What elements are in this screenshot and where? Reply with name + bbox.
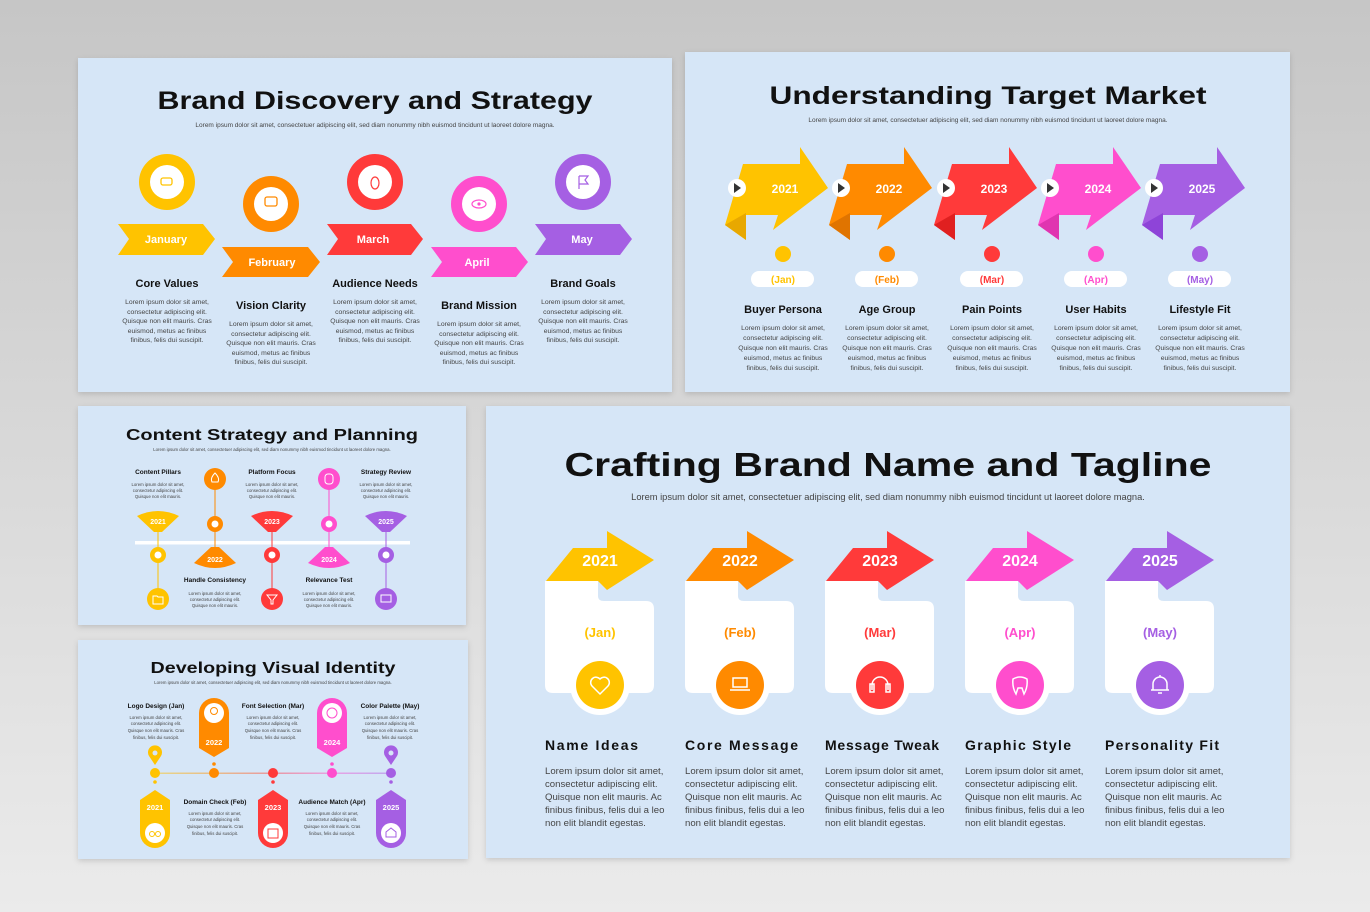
- text: logo design: [128, 703, 184, 740]
- card: 2022 core message: non elit blandit egestas.: [685, 818, 786, 829]
- step: january: consectetur adipiscing elit.: [127, 309, 207, 316]
- text: logo design: Lorem ipsum dolor sit amet,: [129, 715, 183, 720]
- card: 2024 graphic style: 2024: [1002, 553, 1038, 570]
- card: 2025 personality fit: non elit blandit egestas.: [1105, 818, 1206, 829]
- step: 2021 buyer persona: consectetur adipiscing elit.: [743, 335, 823, 342]
- text: content pillars: Quisque non elit mauris.: [135, 494, 181, 499]
- card: 2024 graphic style: consectetur adipiscing elit.: [965, 779, 1078, 790]
- subtitle: Lorem ipsum dolor sit amet, consectetuer adipiscing elit, sed diam nonummy nibh euismod tincidunt ut laoreet dolore magna.: [154, 680, 392, 685]
- step: march: consectetur adipiscing elit.: [335, 309, 415, 316]
- text: domain check: Domain Check (Feb): [184, 799, 246, 806]
- step: march: Quisque non elit mauris. Cras: [330, 318, 420, 325]
- node: 2025: 2025: [378, 519, 394, 526]
- step: 2024 user habits: [1038, 147, 1141, 372]
- step: 2021 buyer persona: finibus, felis dui suscipit.: [747, 365, 820, 372]
- card: 2025 personality fit: [1105, 531, 1224, 829]
- card: 2021 name ideas: 2021: [582, 553, 618, 570]
- node: 2023: [251, 511, 293, 610]
- text: font selection: consectetur adipiscing elit.: [248, 721, 298, 726]
- node: 2022: 2022: [206, 738, 222, 747]
- step: january: Lorem ipsum dolor sit amet,: [125, 299, 209, 306]
- text: platform focus: Platform Focus: [248, 469, 296, 476]
- card: 2021 name ideas: non elit blandit egestas.: [545, 818, 646, 829]
- step: 2023 pain points: finibus, felis dui suscipit.: [956, 365, 1029, 372]
- text: relevance test: [302, 577, 356, 608]
- card: 2023 message tweak: non elit blandit egestas.: [825, 818, 926, 829]
- card: 2022 core message: finibus finibus, felis dui a leo: [685, 805, 804, 816]
- step: 2024 user habits: consectetur adipiscing elit.: [1056, 335, 1136, 342]
- step: 2021 buyer persona: 2021: [772, 182, 799, 196]
- text: logo design: consectetur adipiscing elit.: [131, 721, 181, 726]
- step: 2023 pain points: Pain Points: [962, 304, 1022, 316]
- step: march: Audience Needs: [332, 278, 418, 290]
- step: march: Lorem ipsum dolor sit amet,: [333, 299, 417, 306]
- step: 2025 lifestyle fit: [1142, 147, 1245, 372]
- title: crafting brand name: Crafting Brand Name and Tagline: [564, 446, 1212, 483]
- node: 2024: [317, 698, 347, 778]
- card: 2024 graphic style: non elit blandit egestas.: [965, 818, 1066, 829]
- title: visual identity: Developing Visual Identity: [150, 660, 396, 677]
- card: 2022 core message: [685, 531, 804, 829]
- timeline line: [155, 772, 391, 774]
- title: content strategy: Content Strategy and Planning: [126, 427, 418, 444]
- card: 2023 message tweak: [825, 531, 944, 829]
- step: 2021 buyer persona: [725, 147, 828, 372]
- step: 2025 lifestyle fit: Lorem ipsum dolor sit amet,: [1158, 325, 1242, 332]
- step: 2022 age group: euismod, metus ac finibus: [848, 355, 927, 362]
- text: strategy review: [359, 469, 413, 499]
- text: handle consistency: consectetur adipiscing elit.: [190, 597, 240, 602]
- card: 2021 name ideas: Quisque non elit mauris. Ac: [545, 792, 662, 803]
- node: 2025: [376, 745, 406, 848]
- node: 2023: 2023: [264, 519, 280, 526]
- card: 2024 graphic style: [965, 531, 1084, 829]
- step: may: finibus, felis dui suscipit.: [547, 337, 620, 344]
- card: 2025 personality fit: (May): [1143, 625, 1177, 640]
- text: handle consistency: [184, 577, 246, 608]
- text: logo design: Logo Design (Jan): [128, 703, 184, 710]
- step: 2021 buyer persona: euismod, metus ac finibus: [744, 355, 823, 362]
- step: may: euismod, metus ac finibus: [544, 328, 623, 335]
- text: domain check: consectetur adipiscing elit.: [190, 817, 240, 822]
- text: font selection: [242, 703, 304, 740]
- text: relevance test: consectetur adipiscing elit.: [304, 597, 354, 602]
- text: platform focus: [245, 469, 299, 499]
- step: april: Quisque non elit mauris. Cras: [434, 340, 524, 347]
- card: 2024 graphic style: Lorem ipsum dolor sit amet,: [965, 766, 1083, 777]
- panel: brand discovery: [78, 58, 672, 392]
- text: color palette: finibus, felis dui suscipit.: [367, 735, 413, 740]
- step: may: [535, 154, 632, 344]
- step: february: consectetur adipiscing elit.: [231, 331, 311, 338]
- text: audience match: [298, 799, 366, 836]
- panel: content strategy: [78, 406, 466, 625]
- text: logo design: finibus, felis dui suscipit.: [133, 735, 179, 740]
- text: strategy review: Strategy Review: [361, 469, 412, 476]
- card: 2022 core message: (Feb): [724, 625, 756, 640]
- step: may: May: [571, 234, 594, 246]
- card: 2021 name ideas: [545, 531, 664, 829]
- step: may: consectetur adipiscing elit.: [543, 309, 623, 316]
- text: strategy review: Quisque non elit mauris.: [363, 494, 409, 499]
- subtitle: Lorem ipsum dolor sit amet, consectetuer adipiscing elit, sed diam nonummy nibh euismod tincidunt ut laoreet dolore magna.: [808, 117, 1168, 124]
- node: 2021: 2021: [147, 803, 163, 812]
- node: 2021: [137, 511, 179, 610]
- card: 2024 graphic style: (Apr): [1004, 625, 1036, 640]
- text: color palette: Lorem ipsum dolor sit amet,: [363, 715, 417, 720]
- step: february: euismod, metus ac finibus: [232, 350, 311, 357]
- step: 2025 lifestyle fit: 2025: [1189, 182, 1216, 196]
- text: content pillars: [131, 469, 185, 499]
- card: 2021 name ideas: (Jan): [584, 625, 616, 640]
- text: strategy review: Lorem ipsum dolor sit amet,: [359, 482, 413, 487]
- text: audience match: consectetur adipiscing elit.: [307, 817, 357, 822]
- step: 2022 age group: Age Group: [859, 304, 916, 316]
- text: content pillars: consectetur adipiscing elit.: [133, 488, 183, 493]
- step: april: Brand Mission: [441, 300, 517, 312]
- step: 2021 buyer persona: Buyer Persona: [744, 304, 823, 316]
- step: march: euismod, metus ac finibus: [336, 328, 415, 335]
- text: font selection: Quisque non elit mauris. Cras: [245, 728, 301, 733]
- step: 2023 pain points: Quisque non elit mauris. Cras: [947, 345, 1037, 352]
- card: 2024 graphic style: finibus finibus, felis dui a leo: [965, 805, 1084, 816]
- node: 2024: 2024: [324, 738, 341, 747]
- node: 2023: [258, 768, 288, 848]
- text: color palette: Quisque non elit mauris. Cras: [362, 728, 418, 733]
- text: color palette: [361, 703, 419, 740]
- card: 2025 personality fit: Personality Fit: [1105, 737, 1219, 753]
- step: april: April: [464, 257, 490, 269]
- step: march: March: [357, 234, 389, 246]
- card: 2025 personality fit: consectetur adipiscing elit.: [1105, 779, 1218, 790]
- step: 2025 lifestyle fit: (May): [1187, 275, 1213, 286]
- step: april: consectetur adipiscing elit.: [439, 331, 519, 338]
- subtitle: Lorem ipsum dolor sit amet, consectetuer adipiscing elit, sed diam nonummy nibh euismod tincidunt ut laoreet dolore magna.: [195, 122, 555, 129]
- card: 2023 message tweak: Quisque non elit mauris. Ac: [825, 792, 942, 803]
- text: handle consistency: Lorem ipsum dolor sit amet,: [188, 591, 242, 596]
- step: april: Lorem ipsum dolor sit amet,: [437, 321, 521, 328]
- card: 2022 core message: Core Message: [685, 737, 798, 753]
- step: april: finibus, felis dui suscipit.: [443, 359, 516, 366]
- step: 2024 user habits: Quisque non elit mauris. Cras: [1051, 345, 1141, 352]
- text: domain check: finibus, felis dui suscipit.: [192, 831, 238, 836]
- text: content pillars: Content Pillars: [135, 469, 181, 476]
- card: 2021 name ideas: finibus finibus, felis dui a leo: [545, 805, 664, 816]
- node: 2022: 2022: [207, 557, 223, 564]
- step: 2025 lifestyle fit: finibus, felis dui suscipit.: [1164, 365, 1237, 372]
- card: 2022 core message: consectetur adipiscing elit.: [685, 779, 798, 790]
- text: audience match: Audience Match (Apr): [298, 799, 366, 806]
- card: 2023 message tweak: (Mar): [864, 625, 896, 640]
- text: relevance test: Relevance Test: [306, 577, 353, 584]
- step: 2023 pain points: Lorem ipsum dolor sit amet,: [950, 325, 1034, 332]
- text: content pillars: Lorem ipsum dolor sit amet,: [131, 482, 185, 487]
- step: 2023 pain points: consectetur adipiscing elit.: [952, 335, 1032, 342]
- text: handle consistency: Handle Consistency: [184, 577, 246, 584]
- text: color palette: consectetur adipiscing elit.: [365, 721, 415, 726]
- step: january: Quisque non elit mauris. Cras: [122, 318, 212, 325]
- step: 2022 age group: [829, 147, 932, 372]
- step: march: [327, 154, 423, 344]
- timeline bar: [135, 541, 410, 544]
- card: 2023 message tweak: 2023: [862, 553, 898, 570]
- card: 2025 personality fit: finibus finibus, felis dui a leo: [1105, 805, 1224, 816]
- step: 2022 age group: Lorem ipsum dolor sit amet,: [845, 325, 929, 332]
- step: 2021 buyer persona: (Jan): [771, 275, 795, 286]
- node: 2025: 2025: [383, 803, 399, 812]
- text: color palette: Color Palette (May): [361, 703, 419, 710]
- card: 2024 graphic style: Graphic Style: [965, 737, 1071, 753]
- node: 2021: [140, 745, 170, 848]
- step: january: [118, 154, 215, 344]
- step: 2023 pain points: (Mar): [980, 275, 1004, 286]
- text: font selection: finibus, felis dui suscipit.: [250, 735, 296, 740]
- step: 2025 lifestyle fit: euismod, metus ac finibus: [1161, 355, 1240, 362]
- step: february: finibus, felis dui suscipit.: [235, 359, 308, 366]
- step: 2024 user habits: User Habits: [1065, 304, 1127, 316]
- node: 2022: [194, 468, 236, 568]
- step: 2025 lifestyle fit: Lifestyle Fit: [1169, 304, 1231, 316]
- card: 2023 message tweak: consectetur adipiscing elit.: [825, 779, 938, 790]
- step: 2022 age group: 2022: [876, 182, 903, 196]
- step: 2025 lifestyle fit: Quisque non elit mauris. Cras: [1155, 345, 1245, 352]
- step: 2021 buyer persona: Lorem ipsum dolor sit amet,: [741, 325, 825, 332]
- step: 2022 age group: Quisque non elit mauris. Cras: [842, 345, 932, 352]
- text: relevance test: Lorem ipsum dolor sit amet,: [302, 591, 356, 596]
- step: may: Lorem ipsum dolor sit amet,: [541, 299, 625, 306]
- step: 2022 age group: (Feb): [875, 275, 899, 286]
- text: audience match: Quisque non elit mauris. Cras: [304, 824, 360, 829]
- step: 2024 user habits: euismod, metus ac finibus: [1057, 355, 1136, 362]
- subtitle: Lorem ipsum dolor sit amet, consectetuer adipiscing elit, sed diam nonummy nibh euismod tincidunt ut laoreet dolore magna.: [153, 447, 391, 452]
- step: january: euismod, metus ac finibus: [128, 328, 207, 335]
- node: 2025: [365, 511, 407, 610]
- card: 2023 message tweak: Lorem ipsum dolor sit amet,: [825, 766, 943, 777]
- text: handle consistency: Quisque non elit mauris.: [192, 603, 238, 608]
- card: 2021 name ideas: consectetur adipiscing elit.: [545, 779, 658, 790]
- subtitle: Lorem ipsum dolor sit amet, consectetuer adipiscing elit, sed diam nonummy nibh euismod tincidunt ut laoreet dolore magna.: [631, 492, 1145, 502]
- step: 2022 age group: finibus, felis dui suscipit.: [851, 365, 924, 372]
- step: 2024 user habits: finibus, felis dui suscipit.: [1060, 365, 1133, 372]
- card: 2023 message tweak: Message Tweak: [825, 737, 939, 753]
- step: may: Brand Goals: [550, 278, 616, 290]
- step: april: [431, 176, 528, 366]
- step: february: Lorem ipsum dolor sit amet,: [229, 321, 313, 328]
- node: 2024: 2024: [321, 557, 337, 564]
- text: audience match: Lorem ipsum dolor sit amet,: [305, 811, 359, 816]
- text: platform focus: Lorem ipsum dolor sit amet,: [245, 482, 299, 487]
- node: 2023: 2023: [265, 803, 281, 812]
- text: strategy review: consectetur adipiscing elit.: [361, 488, 411, 493]
- step: february: February: [248, 257, 296, 269]
- text: domain check: [184, 799, 246, 836]
- step: 2024 user habits: 2024: [1085, 182, 1112, 196]
- text: platform focus: consectetur adipiscing elit.: [247, 488, 297, 493]
- step: february: [222, 176, 320, 366]
- title: target market: Understanding Target Market: [770, 82, 1207, 110]
- card: 2025 personality fit: Lorem ipsum dolor sit amet,: [1105, 766, 1223, 777]
- card: 2022 core message: Lorem ipsum dolor sit amet,: [685, 766, 803, 777]
- text: logo design: Quisque non elit mauris. Cras: [128, 728, 184, 733]
- text: font selection: Lorem ipsum dolor sit amet,: [246, 715, 300, 720]
- step: 2021 buyer persona: Quisque non elit mauris. Cras: [738, 345, 828, 352]
- text: domain check: Quisque non elit mauris. Cras: [187, 824, 243, 829]
- step: january: finibus, felis dui suscipit.: [131, 337, 204, 344]
- step: april: euismod, metus ac finibus: [440, 350, 519, 357]
- node: 2021: 2021: [150, 519, 166, 526]
- card: 2023 message tweak: finibus finibus, felis dui a leo: [825, 805, 944, 816]
- step: 2025 lifestyle fit: consectetur adipiscing elit.: [1160, 335, 1240, 342]
- step: february: Vision Clarity: [236, 300, 307, 312]
- text: platform focus: Quisque non elit mauris.: [249, 494, 295, 499]
- step: january: Core Values: [136, 278, 198, 290]
- card: 2022 core message: Quisque non elit mauris. Ac: [685, 792, 802, 803]
- text: relevance test: Quisque non elit mauris.: [306, 603, 352, 608]
- step: 2024 user habits: (Apr): [1084, 275, 1108, 286]
- title: brand discovery: Brand Discovery and Strategy: [158, 87, 593, 115]
- step: march: finibus, felis dui suscipit.: [339, 337, 412, 344]
- card: 2021 name ideas: Lorem ipsum dolor sit amet,: [545, 766, 663, 777]
- card: 2025 personality fit: 2025: [1142, 553, 1178, 570]
- node: 2022: [199, 698, 229, 778]
- step: january: January: [145, 234, 188, 246]
- step: 2022 age group: consectetur adipiscing elit.: [847, 335, 927, 342]
- step: 2024 user habits: Lorem ipsum dolor sit amet,: [1054, 325, 1138, 332]
- card: 2025 personality fit: Quisque non elit mauris. Ac: [1105, 792, 1222, 803]
- step: 2023 pain points: 2023: [981, 182, 1008, 196]
- step: 2023 pain points: euismod, metus ac finibus: [953, 355, 1032, 362]
- text: font selection: Font Selection (Mar): [242, 703, 304, 710]
- node: 2024: [308, 468, 350, 568]
- panel: target market: [685, 52, 1290, 392]
- panel: visual identity: [78, 640, 468, 859]
- step: 2023 pain points: [934, 147, 1037, 372]
- card: 2021 name ideas: Name Ideas: [545, 737, 638, 753]
- text: audience match: finibus, felis dui suscipit.: [309, 831, 355, 836]
- card: 2024 graphic style: Quisque non elit mauris. Ac: [965, 792, 1082, 803]
- panel: crafting brand name: [486, 406, 1290, 858]
- card: 2022 core message: 2022: [722, 553, 758, 570]
- step: may: Quisque non elit mauris. Cras: [538, 318, 628, 325]
- step: february: Quisque non elit mauris. Cras: [226, 340, 316, 347]
- text: domain check: Lorem ipsum dolor sit amet,: [188, 811, 242, 816]
